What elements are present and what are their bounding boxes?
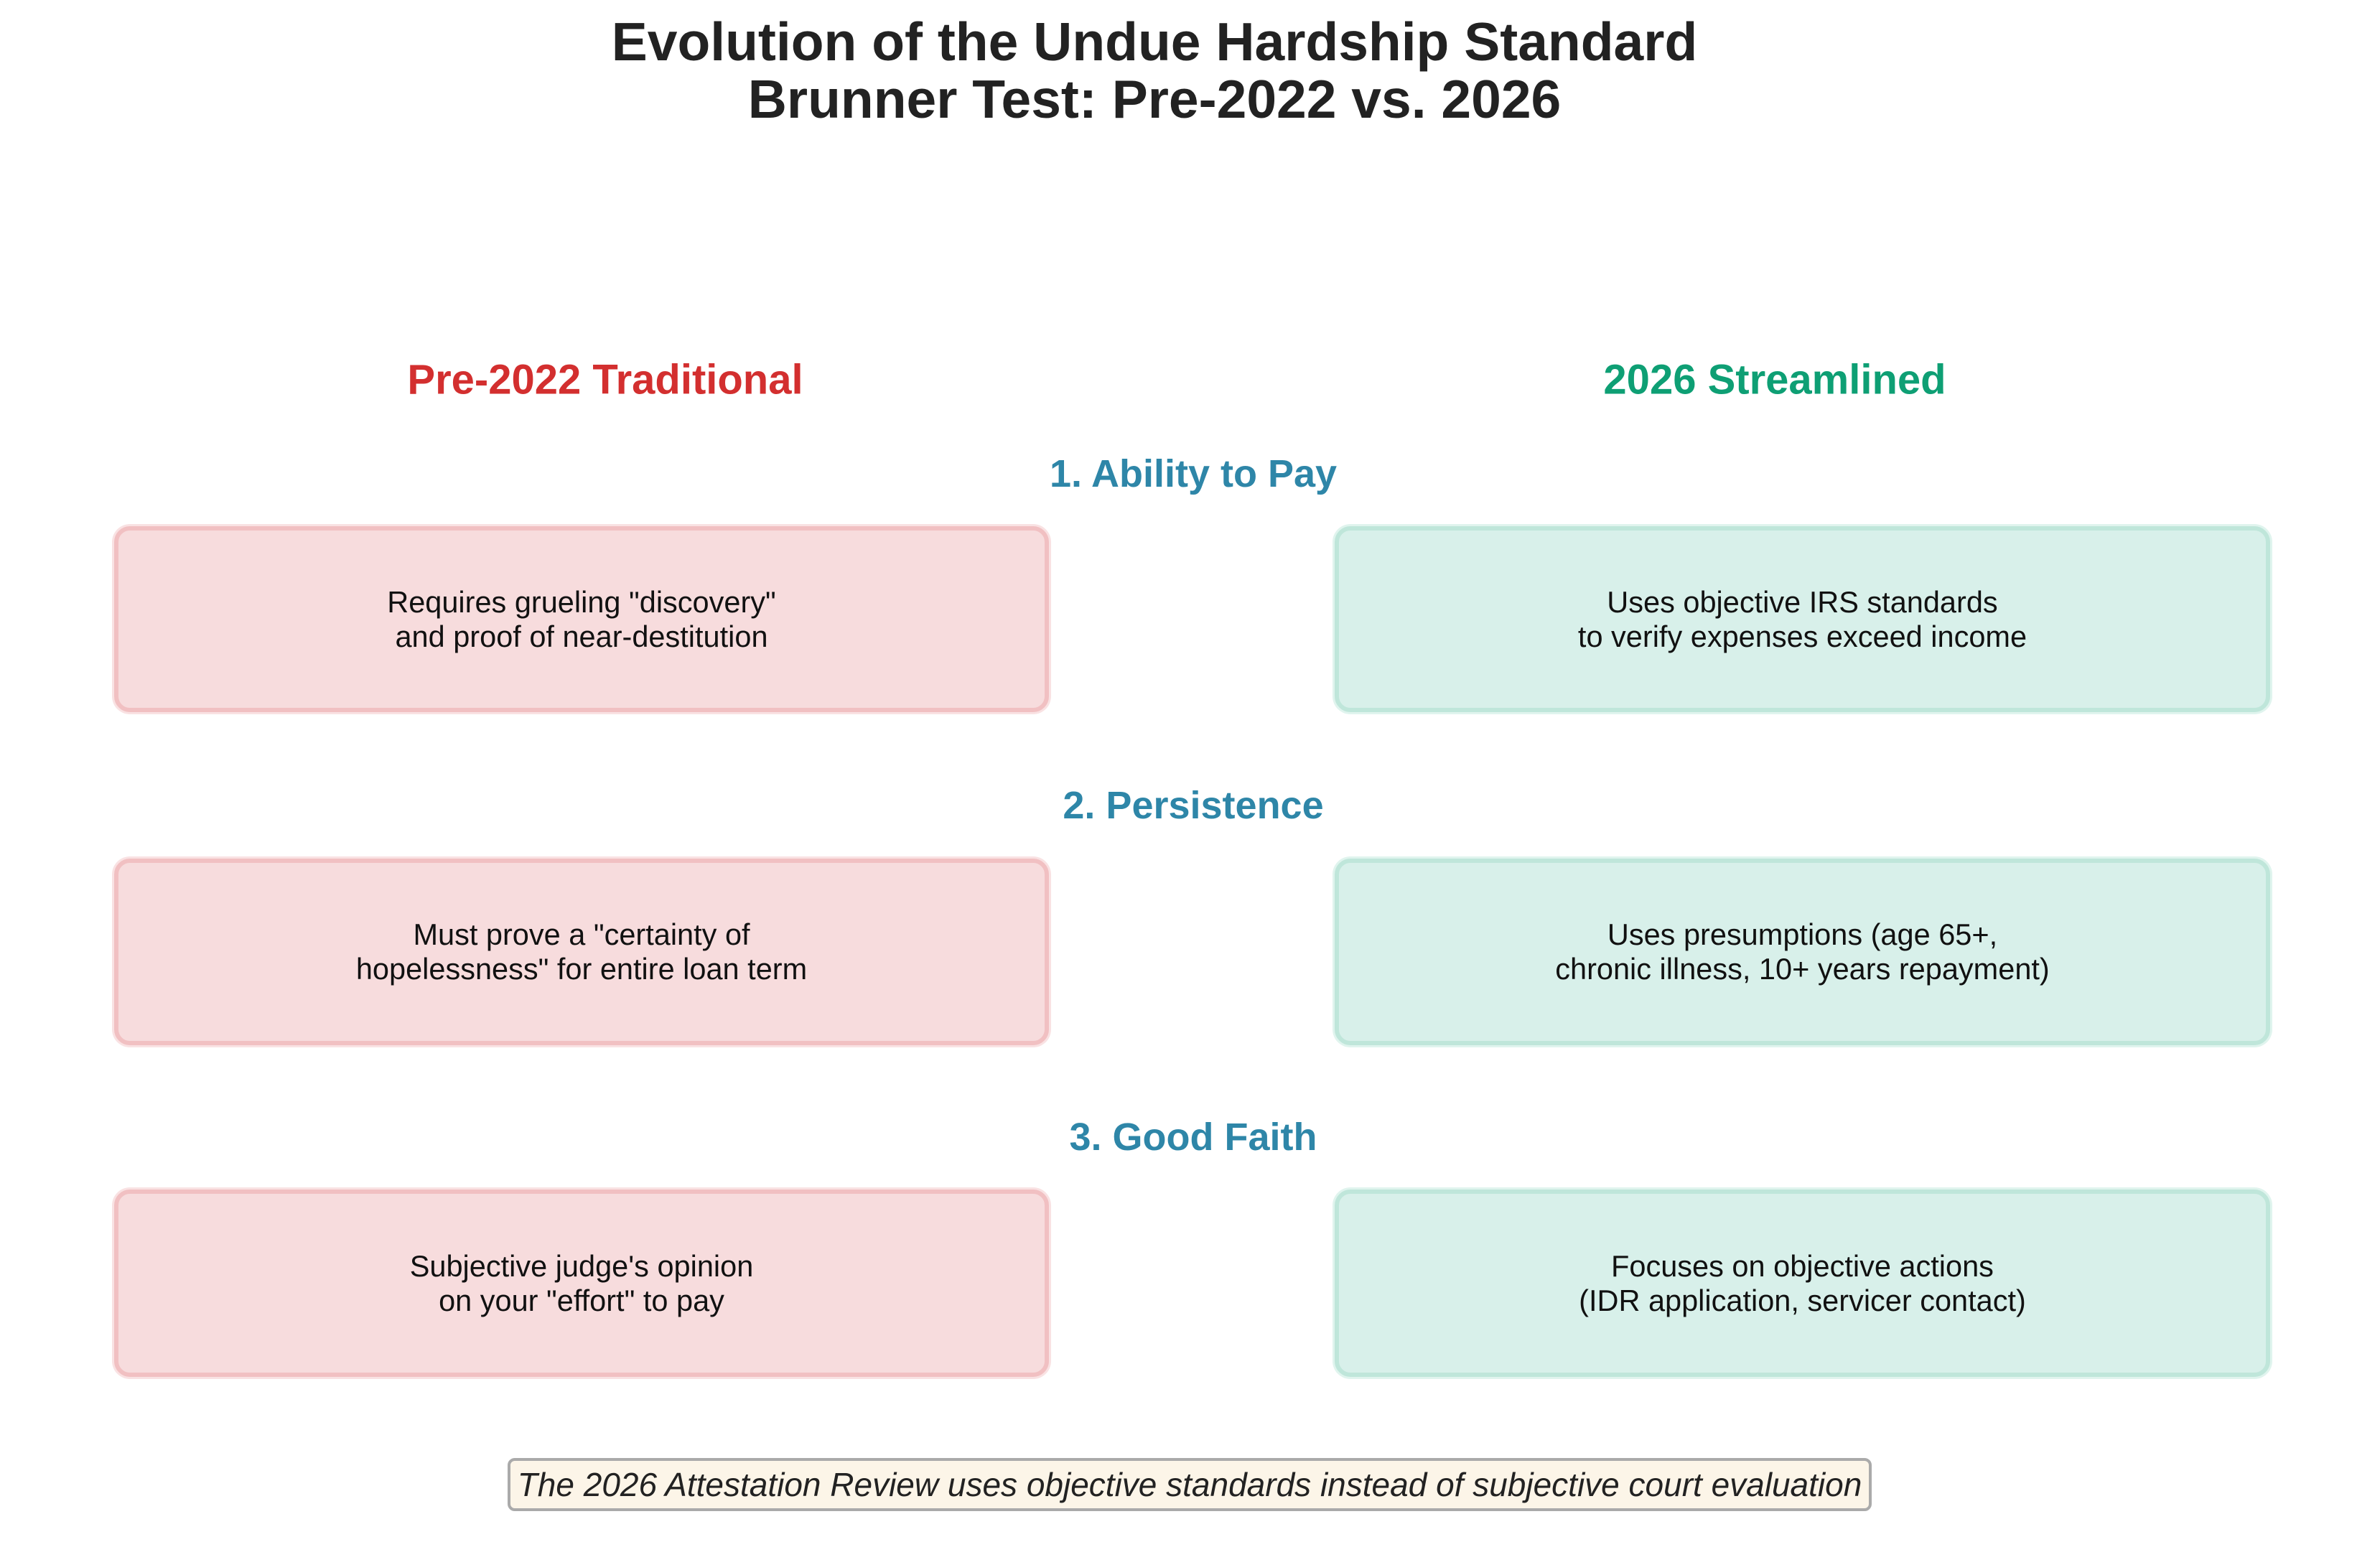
title xyxy=(612,11,1697,129)
column header: 2026: 2026 Streamlined xyxy=(1603,356,1946,403)
section heading: ability to pay: 1. Ability to Pay xyxy=(1050,452,1337,495)
section heading: good faith: 3. Good Faith xyxy=(1070,1116,1317,1159)
box: 2026 persistence: chronic illness, 10+ years repayment) xyxy=(1555,952,2050,986)
box: pre-2022 persistence: hopelessness" for entire loan term xyxy=(356,952,807,986)
box: 2026 ability: Uses objective IRS standards xyxy=(1607,584,1998,619)
box: 2026 persistence: Uses presumptions (age 65+, xyxy=(1607,917,1997,951)
box: 2026 good faith: Focuses on objective actions xyxy=(1611,1249,1994,1282)
title: Evolution of the Undue Hardship Standard xyxy=(612,11,1697,72)
box: pre-2022 good faith xyxy=(114,1190,1049,1377)
box: pre-2022 persistence: Must prove a "certainty of xyxy=(413,917,750,951)
box: 2026 good faith xyxy=(1335,1190,2270,1377)
box: pre-2022 ability: Requires grueling "discovery" xyxy=(387,584,776,619)
box: pre-2022 good faith: Subjective judge's opinion xyxy=(410,1249,753,1282)
box: 2026 ability xyxy=(1335,526,2270,712)
box: pre-2022 persistence xyxy=(114,859,1049,1045)
box: 2026 good faith: (IDR application, servicer contact) xyxy=(1579,1284,2026,1317)
section heading: persistence: 2. Persistence xyxy=(1063,784,1324,827)
box: 2026 persistence xyxy=(1335,859,2270,1045)
box: pre-2022 ability xyxy=(114,526,1049,712)
box: 2026 ability: to verify expenses exceed income xyxy=(1578,619,2027,653)
callout xyxy=(508,1458,1872,1511)
box: pre-2022 good faith: on your "effort" to pay xyxy=(439,1284,724,1317)
box: pre-2022 ability: and proof of near-destitution xyxy=(395,619,768,653)
title: Brunner Test: Pre-2022 vs. 2026 xyxy=(748,69,1561,129)
callout: The 2026 Attestation Review uses objective standards instead of subjective court evaluation xyxy=(518,1466,1862,1503)
column header: pre-2022: Pre-2022 Traditional xyxy=(407,356,803,403)
